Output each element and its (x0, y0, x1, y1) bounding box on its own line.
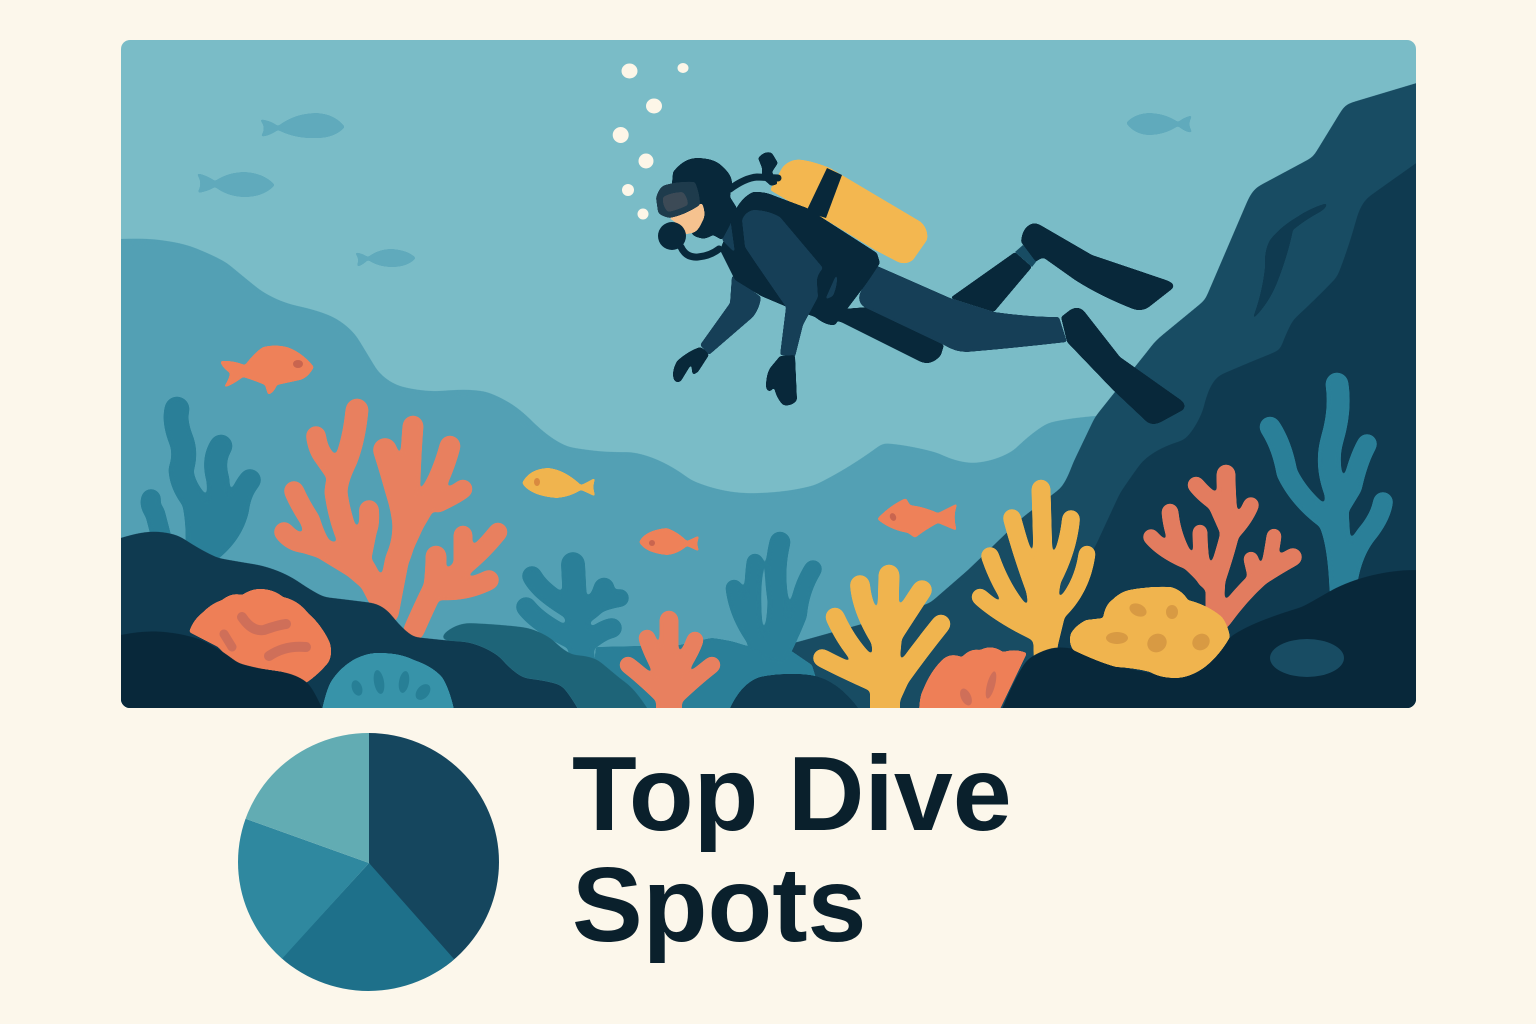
lower fin (1061, 308, 1185, 424)
regulator (658, 222, 686, 250)
midground rock (443, 623, 647, 708)
mask glass (663, 192, 688, 212)
orange sponge lower (919, 648, 1026, 708)
sponge markings (224, 617, 306, 656)
slice: darkest (369, 700, 520, 1024)
seaweed right (1270, 384, 1383, 590)
upper fin (1021, 223, 1174, 310)
mask (656, 182, 700, 218)
fish eye (293, 360, 303, 368)
near arm (742, 210, 823, 357)
seaweed center (734, 542, 813, 655)
seaweed left (150, 409, 250, 553)
valve (758, 152, 778, 186)
torso vest (720, 192, 880, 325)
lower-left rocks (121, 532, 647, 708)
upper fin leg (950, 252, 1032, 312)
title: Spots (572, 846, 866, 964)
coral: yellow right (980, 489, 1087, 665)
dark rock face (1058, 164, 1416, 708)
title: Top Dive (572, 735, 1012, 853)
fish: orange small (639, 528, 700, 555)
fish: orange right (877, 498, 958, 538)
coral: small orange (628, 620, 712, 730)
left rock mound (121, 532, 578, 708)
fish: yellow (522, 468, 596, 498)
coral: orange right (1151, 474, 1293, 630)
water background (121, 40, 1416, 708)
pie chart (210, 700, 520, 1024)
glove right (766, 355, 797, 405)
scuba diver (656, 152, 1185, 424)
leg (859, 265, 1067, 352)
distant seabed hills (121, 238, 1096, 708)
yellow sponge (1070, 587, 1230, 678)
hood (670, 158, 737, 240)
midground teal band (594, 638, 816, 708)
coral: yellow left (822, 575, 941, 730)
far arm (700, 275, 761, 355)
orange brain sponge (189, 589, 331, 683)
dome markings (352, 670, 430, 700)
face (669, 203, 704, 234)
tank strap (806, 168, 842, 218)
coral: large orange (284, 410, 498, 630)
glove left (673, 347, 709, 382)
tank hose (730, 177, 778, 189)
sponge spots (1106, 604, 1210, 652)
fish eye (889, 512, 897, 522)
teal dome coral (322, 653, 454, 708)
air bubbles (613, 63, 688, 220)
regulator hose (681, 247, 719, 257)
background fish silhouettes (196, 113, 1193, 267)
rock oval (1270, 639, 1344, 677)
large rock wall (792, 83, 1416, 708)
low dark rock center (730, 674, 858, 708)
lower dark leg (816, 307, 944, 363)
teal coral center (526, 564, 620, 660)
rock crevice (1252, 203, 1327, 320)
darkest left rock (121, 632, 322, 708)
fish: orange large (220, 346, 314, 395)
vest accent (825, 273, 837, 300)
slice: deep teal (220, 863, 500, 1011)
lower sponge markings (960, 672, 996, 706)
panel: underwater scene (90, 40, 1450, 740)
air tank (770, 160, 927, 263)
infographic canvas (121, 40, 1416, 991)
fish eye (649, 540, 655, 546)
vest side panel (722, 217, 735, 253)
fish eye (534, 478, 540, 486)
darkest right rock (1002, 570, 1416, 708)
slice: mid teal (210, 806, 369, 994)
slice: light teal (210, 700, 369, 863)
ankle cuff (1015, 245, 1039, 267)
